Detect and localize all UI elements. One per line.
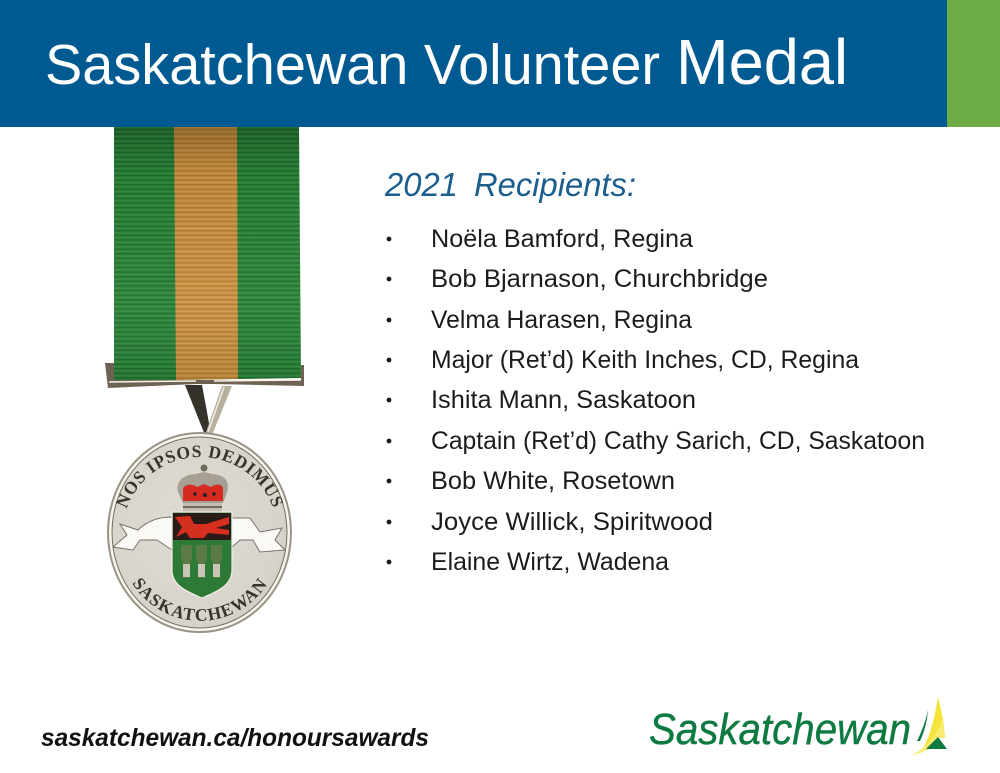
recipients list: [387, 225, 925, 576]
logo sail icon: [912, 697, 947, 755]
recipients heading: [384, 166, 636, 203]
scroll banner: [113, 517, 285, 552]
wheat sheaves: [181, 545, 222, 578]
green accent block: [947, 0, 1000, 127]
recipients heading: Recipients:: [474, 166, 636, 203]
title: Saskatchewan Volunteer: [45, 33, 660, 97]
medal inscription: NOS IPSOS DEDIMUS: [116, 446, 283, 509]
recipient 1: Noëla Bamford, Regina: [431, 225, 693, 253]
recipient 7: Bob White, Rosetown: [431, 467, 675, 495]
recipients heading: 2021: [384, 166, 458, 203]
website url: saskatchewan.ca/honoursawards: [41, 724, 429, 752]
recipient 8: Joyce Willick, Spiritwood: [431, 508, 713, 536]
recipient 4: Major (Ret’d) Keith Inches, CD, Regina: [431, 346, 859, 374]
recipient 9: Elaine Wirtz, Wadena: [431, 548, 669, 576]
logo wordmark: Saskatchewan: [649, 705, 911, 754]
recipient 5: Ishita Mann, Saskatoon: [431, 386, 696, 414]
medal inscription: [116, 446, 283, 621]
recipient 2: Bob Bjarnason, Churchbridge: [431, 265, 768, 293]
V clasp: [185, 385, 232, 435]
coat of arms shield: [172, 512, 232, 598]
ribbon: [114, 127, 301, 381]
suspension bar: [105, 363, 304, 388]
recipient 3: Velma Harasen, Regina: [431, 306, 692, 334]
crown: [177, 464, 228, 512]
title: [45, 26, 848, 98]
red lion: [175, 516, 229, 538]
medal inscription: SASKATCHEWAN: [132, 578, 266, 621]
medal disc: [107, 432, 292, 633]
title: Medal: [676, 26, 848, 98]
medal illustration: [105, 127, 304, 633]
recipient 6: Captain (Ret’d) Cathy Sarich, CD, Saskatoon: [431, 427, 925, 455]
header banner: [0, 0, 1000, 127]
saskatchewan logo: [649, 697, 947, 755]
